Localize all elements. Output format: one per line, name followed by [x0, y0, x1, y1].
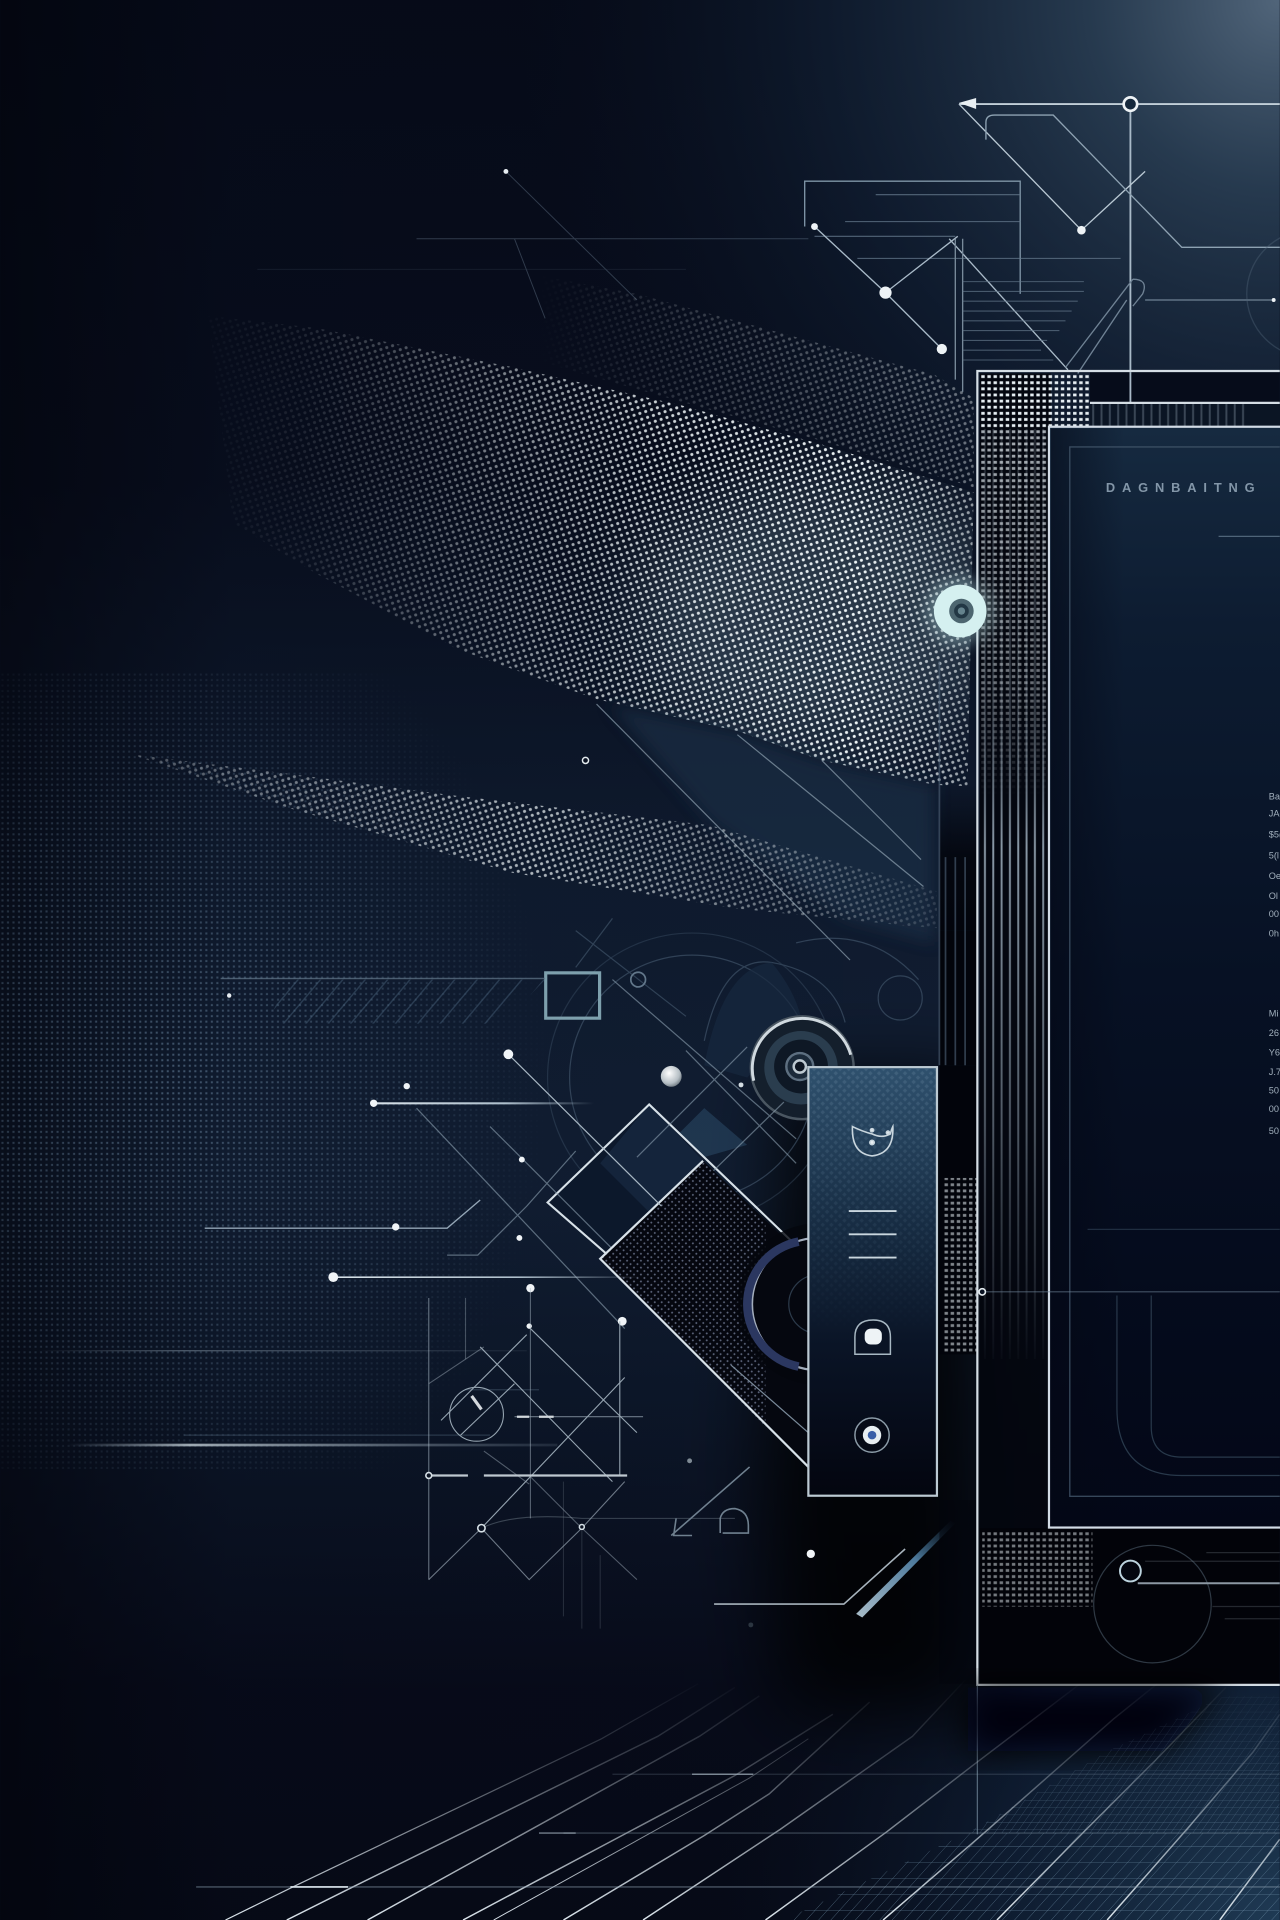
- clock hand: [472, 1396, 481, 1409]
- small ring upper: [631, 972, 646, 987]
- inner frame: [1070, 447, 1280, 1496]
- vertical spine: [1129, 104, 1131, 404]
- text block two: 50: [1269, 1126, 1279, 1136]
- panel heading: DAGNBAITNG: [1106, 480, 1262, 495]
- text block two: 50: [1269, 1085, 1279, 1095]
- icon: lit badge: [855, 1320, 890, 1354]
- thick measure line: [429, 1475, 627, 1477]
- faint gear right: [1247, 230, 1280, 358]
- node line four: [333, 1276, 639, 1278]
- small floating dots: [687, 1082, 753, 1627]
- monitor lower lines: [1138, 1553, 1280, 1619]
- node line two: [374, 1102, 594, 1104]
- text block one: 00: [1269, 909, 1279, 919]
- chamfered shape: [986, 115, 1280, 247]
- halftone wave glow: [637, 478, 1004, 747]
- stripes beside monitor: [939, 661, 977, 1684]
- top ring node: [1124, 97, 1137, 111]
- top nodes: [811, 223, 1276, 354]
- floor horizontal bands: [196, 1774, 1280, 1887]
- node line one: [508, 1054, 661, 1206]
- panel lower rule: [1088, 1228, 1280, 1230]
- measure accents: [517, 1416, 554, 1418]
- monitor left drop line: [976, 1685, 978, 1834]
- icon: three lines: [849, 1211, 897, 1258]
- monitor outer frame: [977, 371, 1280, 1685]
- monitor lower dark field: [980, 1528, 1280, 1685]
- dark band below monitor: [968, 1687, 1225, 1751]
- dark shadow behind device cluster: [759, 1078, 980, 1714]
- text block one: Ol: [1269, 891, 1278, 901]
- panel texture: [811, 1069, 936, 1252]
- diamond card back: [548, 1104, 802, 1286]
- long faint line: [37, 1350, 527, 1351]
- top schematic: [805, 98, 1280, 404]
- left edge dot grid: [1, 674, 510, 1469]
- lattice rings: [426, 1473, 584, 1532]
- halftone wave: main band: [208, 316, 974, 786]
- long bright line: [68, 1444, 557, 1446]
- clock diagonal: [461, 1384, 514, 1435]
- faint gears behind cluster: [548, 918, 922, 1222]
- faint construction lines upper middle: [257, 171, 808, 318]
- double vertical: [955, 239, 963, 392]
- halftone wave: lower band: [131, 754, 937, 928]
- top arrowhead: [959, 98, 976, 109]
- monitor lower halftone: [982, 1531, 1092, 1607]
- translucent wedge beneath wave: [597, 704, 934, 960]
- side control panel: [808, 1067, 937, 1496]
- clock circle: [450, 1387, 503, 1441]
- text block two: 00: [1269, 1104, 1279, 1114]
- hatch strip: [267, 980, 545, 1024]
- faint circuit traces: [1117, 1296, 1280, 1476]
- left line upper: [221, 978, 545, 979]
- lower diagonal pair: [814, 227, 1068, 370]
- monitor lower ring: [1120, 1561, 1141, 1581]
- monitor corner halftone: [980, 373, 1090, 429]
- eye ring marker: [934, 585, 987, 637]
- small ring node: [582, 757, 589, 763]
- eye ring glow: [926, 577, 994, 645]
- monitor top bar: [1090, 372, 1280, 426]
- side halftone block: [939, 1176, 977, 1354]
- text block two: Y6: [1269, 1048, 1280, 1058]
- square marker: [546, 973, 600, 1018]
- stripe block: [963, 282, 1084, 360]
- text block one: Ba: [1269, 792, 1280, 802]
- left node lines: [37, 1054, 661, 1446]
- ruled box: [805, 181, 1020, 294]
- text block two: [1269, 1008, 1280, 1136]
- lattice schematic: [429, 1288, 735, 1629]
- diamond card front: [600, 1161, 808, 1467]
- diagonal cross lines: [417, 980, 796, 1329]
- top arrow line: [959, 103, 1280, 105]
- node line three: [205, 1200, 480, 1228]
- lens lower: [737, 1223, 899, 1385]
- monitor left stripe zone: [980, 373, 1051, 1531]
- lens upper: [751, 1016, 854, 1119]
- text block two: Mi: [1269, 1008, 1278, 1018]
- small dot upper left: [227, 993, 231, 998]
- floor mesh far: [968, 1696, 1280, 1833]
- text block one: [1269, 792, 1280, 939]
- panel node line: [986, 1291, 1280, 1293]
- diagonal and node: [959, 104, 1145, 230]
- text block one: 5(l: [1269, 850, 1279, 860]
- secondary faint line: [184, 1390, 539, 1435]
- pearl ball: [661, 1066, 682, 1087]
- ruled box lines: [814, 195, 1121, 258]
- panel edge shade: [1051, 429, 1124, 1526]
- faint lower circle: [1094, 1545, 1211, 1663]
- faint bracket: [1066, 279, 1274, 373]
- icon: shield face: [852, 1127, 893, 1156]
- text block two: 26: [1269, 1028, 1279, 1038]
- bottom streak: [856, 1521, 955, 1618]
- floor corner segment: [290, 1886, 348, 1888]
- floor mesh near: [784, 1833, 1280, 1920]
- icon: ring button: [855, 1418, 889, 1452]
- main screen panel: [1049, 427, 1280, 1528]
- heading rule: [1219, 535, 1280, 537]
- text block one: 0h: [1269, 929, 1279, 939]
- upper node: [503, 169, 508, 174]
- bottom callout line: [714, 1549, 905, 1604]
- fan blade fill: [704, 962, 802, 1078]
- halftone wave: dim upper band: [572, 284, 974, 487]
- bottom dot: [807, 1550, 815, 1558]
- lower left tools: [671, 1467, 750, 1536]
- left nodes: [328, 1049, 627, 1329]
- floor short dash: [539, 1774, 753, 1833]
- floor lines: [226, 1678, 1280, 1920]
- panel node: [979, 1289, 985, 1295]
